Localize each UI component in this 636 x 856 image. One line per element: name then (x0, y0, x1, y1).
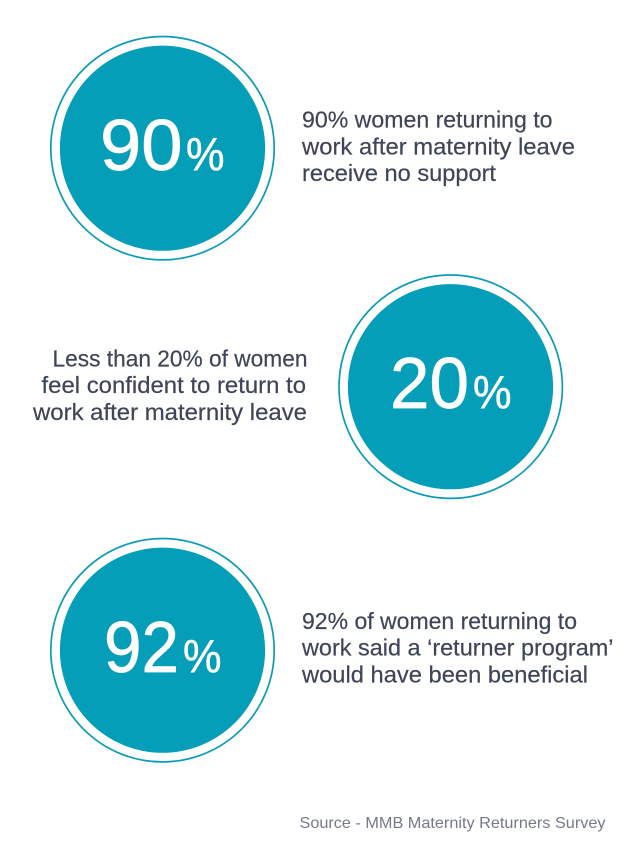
circle: 20%: % (473, 366, 512, 418)
circle: 20%: 20 (390, 344, 469, 424)
text: 92% statement: work said a ‘returner program’ (301, 635, 614, 661)
text: 90% statement: 90% women returning to (302, 106, 552, 132)
text: 20% statement: Less than 20% of women (52, 346, 308, 372)
source note: Source - MMB Maternity Returners Survey (300, 815, 606, 832)
circle: 92%: % (183, 630, 222, 682)
text: 20% statement: feel confident to return to (42, 372, 306, 398)
text: 90% statement (301, 106, 575, 186)
circle: 92%: 92 (104, 608, 179, 688)
circle: 90% (51, 36, 274, 260)
text: 20% statement: work after maternity leave (32, 399, 307, 425)
text: 92% statement (301, 608, 614, 687)
text: 90% statement: work after maternity leave (301, 133, 575, 159)
circle: 92% (51, 538, 274, 762)
text: 20% statement (32, 346, 308, 425)
text: 92% statement: would have been beneficial (301, 661, 588, 687)
circle: 90%: 90 (100, 106, 182, 186)
text: 92% statement: 92% of women returning to (302, 608, 577, 634)
circle: 90%: % (186, 128, 224, 180)
circle: 20% (339, 275, 562, 498)
text: 90% statement: receive no support (302, 160, 497, 186)
